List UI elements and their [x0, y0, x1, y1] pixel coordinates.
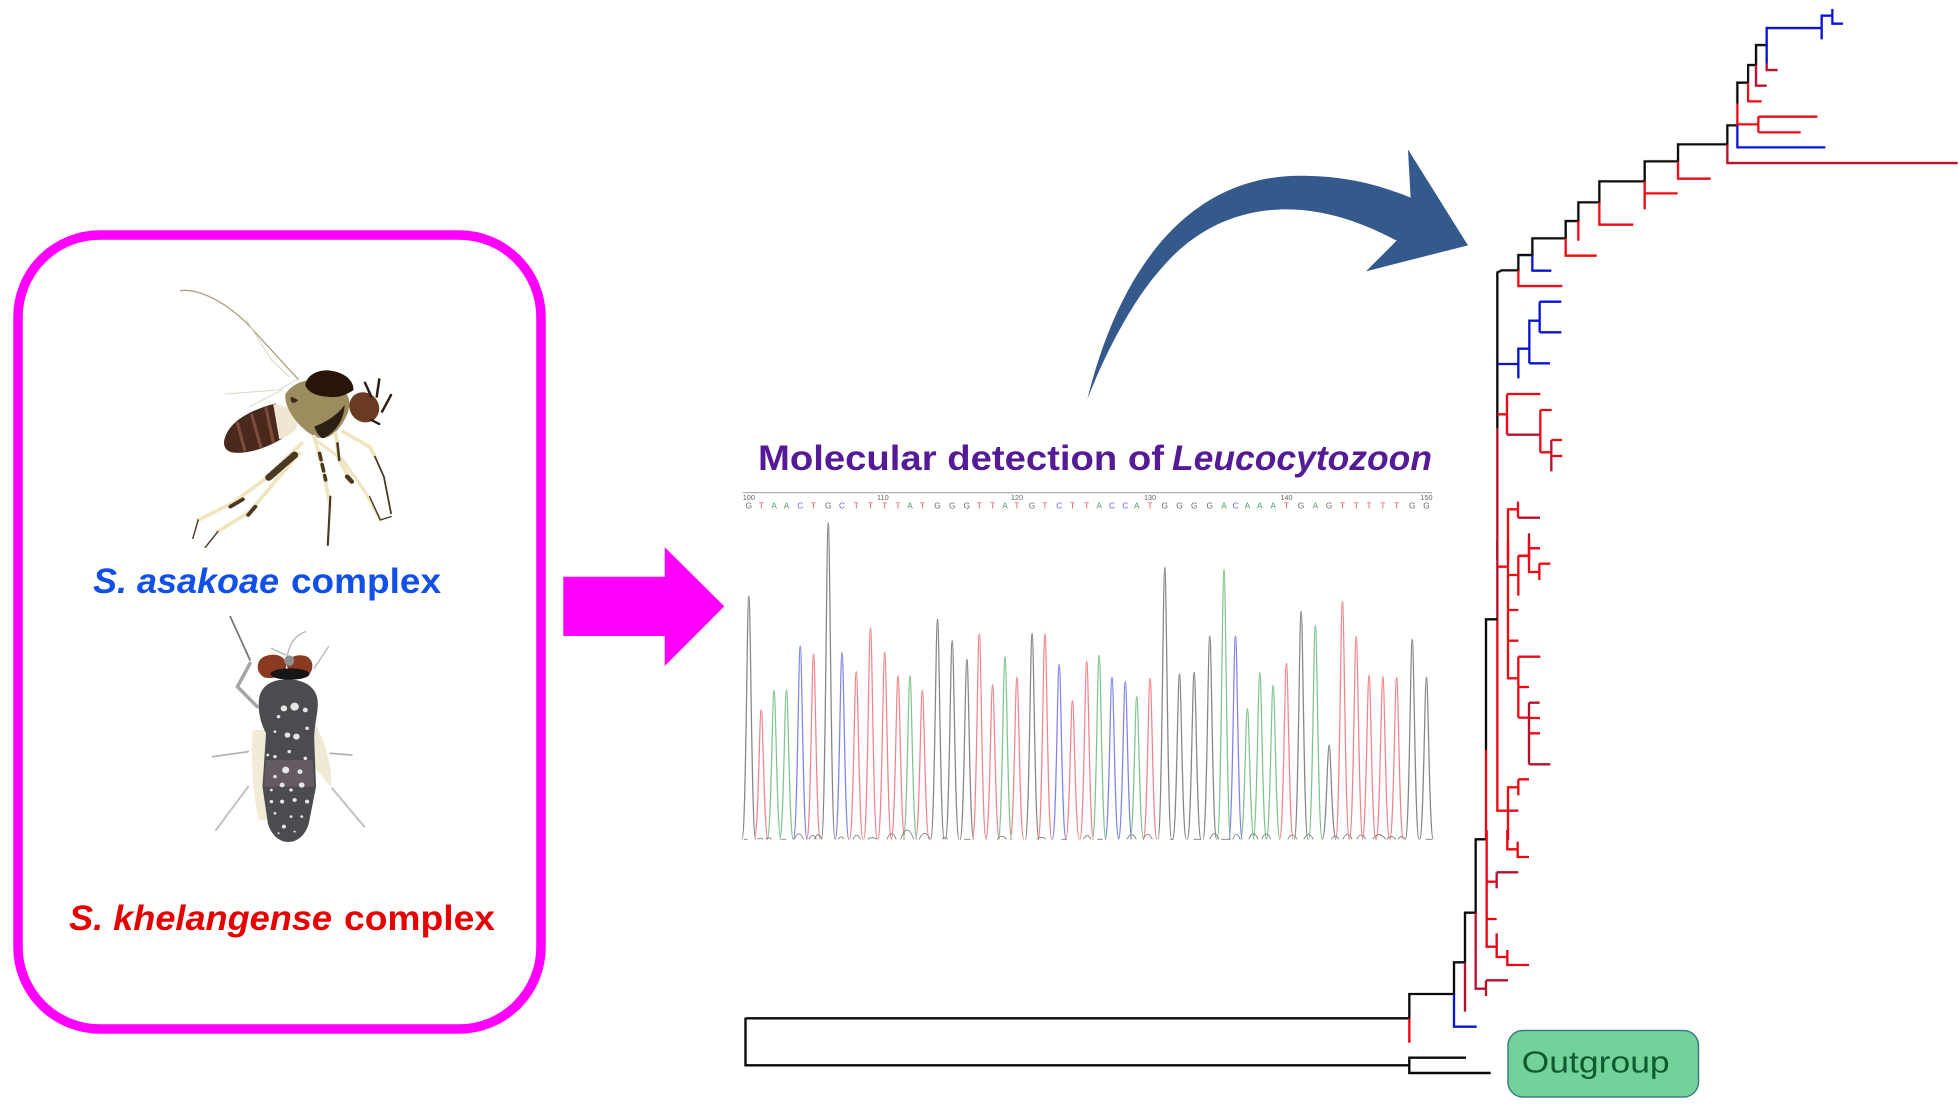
sequence ruler: 150	[1420, 493, 1433, 502]
label: S. khelangense complex	[69, 899, 496, 938]
label: S. khelangense complex: S. khelangense	[69, 899, 332, 938]
chart: DNA sequencing chromatogram	[742, 493, 1433, 839]
sequence ruler: 130	[1144, 493, 1156, 502]
tree: basal branches	[746, 830, 1529, 1043]
arrow: magenta arrow to sequencing	[563, 547, 724, 666]
tree: upper clades	[1497, 9, 1958, 286]
base calls: AAAAAAAAAAA	[771, 501, 1319, 511]
sequence ruler: 120	[1011, 493, 1023, 502]
heading: molecular detection: Molecular detection of	[758, 439, 1164, 478]
base calls: TTTTTTTTTTTTTTTTTTTT	[759, 501, 1399, 511]
sequence ruler: 110	[877, 493, 889, 502]
icon: S. asakoae fly specimen	[180, 290, 391, 547]
label: S. asakoae complex: S. asakoae	[93, 562, 279, 601]
label: S. khelangense complex: complex	[344, 899, 496, 938]
label: S. asakoae complex: complex	[291, 562, 442, 601]
tree: middle clades	[1497, 272, 1562, 560]
callout: outgroup label: Outgroup	[1522, 1045, 1670, 1080]
callout: outgroup label	[1508, 1030, 1698, 1097]
sequence ruler: 100	[743, 493, 755, 502]
sequence ruler	[743, 493, 1433, 502]
trace peaks	[742, 523, 1433, 839]
base calls: GGGGGGGGGGGGGG	[746, 501, 1430, 511]
arrow: curved blue arrow to phylogenetic tree	[1087, 149, 1468, 399]
base calls: CCCCCC	[797, 501, 1238, 511]
tree: lower red clades	[1486, 540, 1550, 840]
heading: molecular detection	[758, 439, 1432, 478]
label: S. asakoae complex	[93, 562, 442, 601]
panel border	[18, 235, 541, 1029]
heading: molecular detection: Leucocytozoon	[1172, 439, 1432, 478]
sequence ruler: 140	[1280, 493, 1293, 502]
icon: S. khelangense fly specimen	[212, 617, 364, 842]
chart: phylogenetic tree	[746, 9, 1958, 1073]
tree: root bracket and outgroup branches	[746, 1018, 1491, 1073]
panel: simuliid species complexes	[18, 235, 541, 1029]
